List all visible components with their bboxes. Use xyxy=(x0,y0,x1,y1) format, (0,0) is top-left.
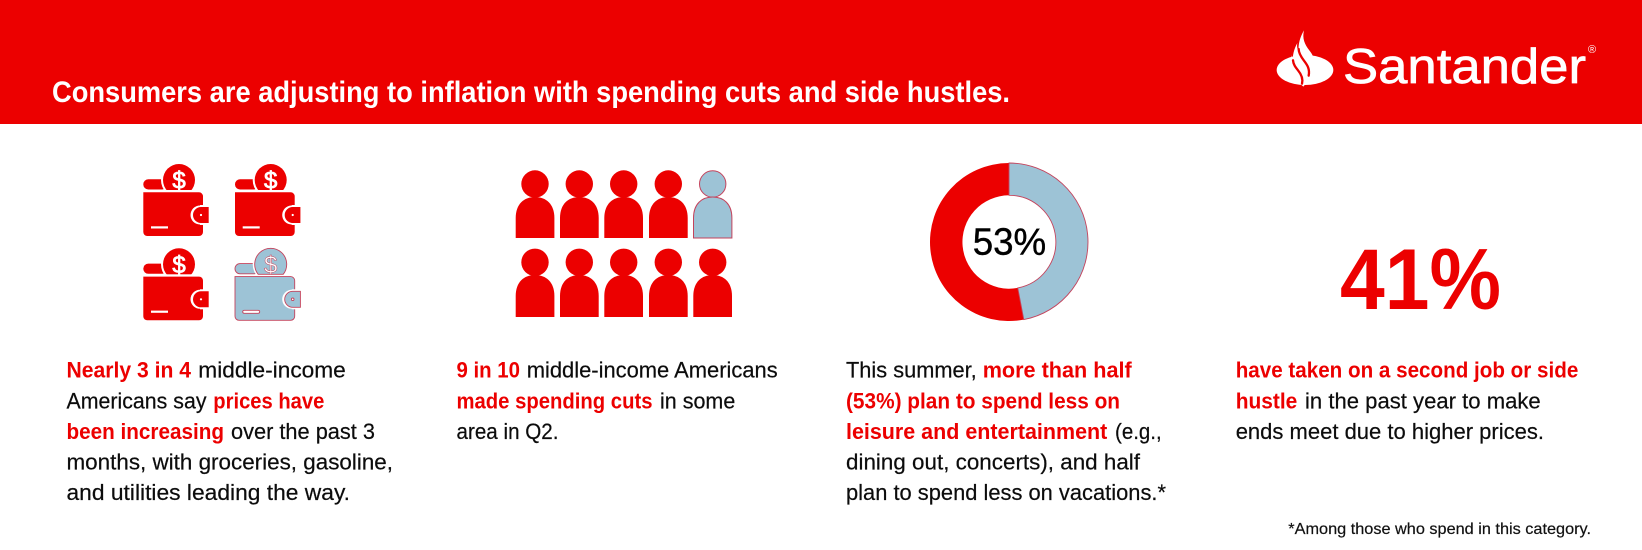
registered mark: ® xyxy=(1588,44,1596,56)
text block: side hustle: in the past year to make xyxy=(1305,388,1541,414)
text block: side hustle: ends meet due to higher prices. xyxy=(1236,419,1544,444)
header band xyxy=(0,0,1642,124)
panel: spending cuts xyxy=(456,170,778,444)
text block: leisure: dining out, concerts), and half xyxy=(846,450,1141,474)
text block: leisure: plan to spend less on vacations.* xyxy=(846,480,1166,505)
text block: spending cuts: 9 in 10 xyxy=(456,358,520,382)
icon: wallets xyxy=(143,162,301,320)
text block: leisure: (e.g., xyxy=(1115,419,1162,444)
text block: prices: months, with groceries, gasoline, xyxy=(66,450,393,474)
icon: blue wallet xyxy=(235,246,301,320)
text block: side hustle xyxy=(1236,358,1578,444)
donut label: 53% xyxy=(973,222,1046,264)
text block: prices: over the past 3 xyxy=(231,419,375,444)
text block: leisure: leisure and entertainment xyxy=(846,419,1108,444)
Santander logo xyxy=(1277,30,1596,94)
icon: red wallet 3 xyxy=(143,246,210,320)
text block: prices: middle-income xyxy=(198,358,346,382)
text block: prices: been increasing xyxy=(66,419,224,444)
text block: leisure: This summer, xyxy=(846,358,977,382)
icon: ten people xyxy=(516,170,732,317)
text block: prices: Nearly 3 in 4 xyxy=(66,358,192,382)
text block: prices xyxy=(66,358,393,505)
text block: spending cuts: area in Q2. xyxy=(456,419,558,444)
icon: red wallet 1 xyxy=(143,162,210,236)
text block: prices: and utilities leading the way. xyxy=(66,480,350,505)
big stat: 41% xyxy=(1340,232,1501,328)
donut chart xyxy=(930,163,1088,321)
text block: spending cuts xyxy=(456,358,778,444)
text block: side hustle: hustle xyxy=(1236,388,1297,414)
icon: blue wallet: $ xyxy=(264,252,277,279)
icon: red wallet 2 xyxy=(235,162,301,236)
text block: spending cuts: middle-income Americans xyxy=(527,358,778,382)
icon: person row 2 xyxy=(516,249,732,317)
text block: leisure: more than half xyxy=(983,358,1132,382)
icon: red wallet 2: $ xyxy=(264,168,277,194)
text block: prices: Americans say xyxy=(66,388,206,414)
icon: person row 1 xyxy=(516,170,732,238)
icon: Santander flame xyxy=(1277,30,1333,87)
wordmark: Santander xyxy=(1343,40,1586,94)
text block: leisure xyxy=(846,358,1166,505)
text block: prices: prices have xyxy=(213,388,324,414)
panel: side hustle xyxy=(1236,232,1578,444)
text block: side hustle: have taken on a second job or side xyxy=(1236,358,1578,382)
icon: red wallet 1: $ xyxy=(172,168,186,194)
text block: spending cuts: in some xyxy=(660,388,735,414)
text block: leisure: (53%) plan to spend less on xyxy=(846,388,1120,414)
icon: red wallet 3: $ xyxy=(172,252,186,279)
panel: prices xyxy=(66,162,393,505)
text block: spending cuts: made spending cuts xyxy=(456,388,652,414)
footnote: *Among those who spend in this category. xyxy=(1288,521,1591,538)
title: Consumers are adjusting to inflation with spending cuts and side hustles. xyxy=(52,76,1010,109)
panel: leisure xyxy=(846,163,1166,505)
